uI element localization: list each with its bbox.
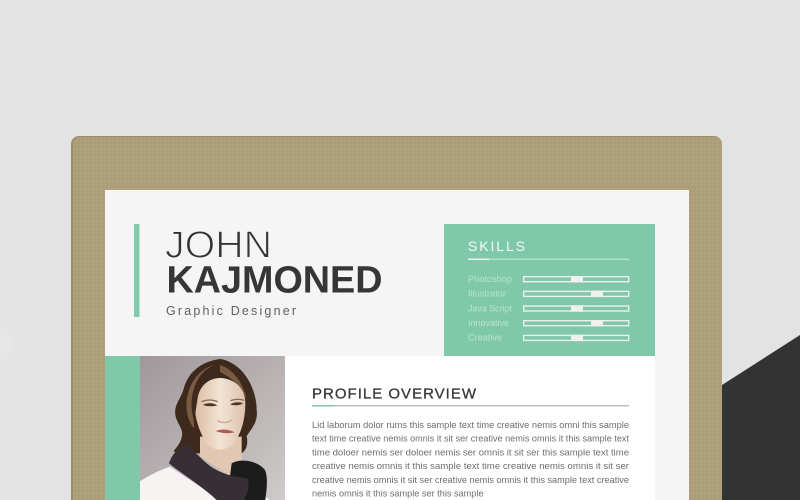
- skill row: Creative: [468, 333, 629, 343]
- skill row: Java Script: [468, 303, 629, 313]
- skill row: Creative: Creative: [468, 333, 502, 343]
- dark corner shape: [722, 335, 800, 500]
- mouth: [216, 429, 235, 433]
- dark scarf: [227, 461, 267, 500]
- skill row: Java Script: Java Script: [468, 303, 512, 313]
- profile paragraph: creative nemis omnis it this sample text time creative nemis omnis it sit ser: [312, 461, 629, 472]
- neck: [200, 437, 242, 478]
- last name: KAJMONED: [166, 260, 382, 302]
- profile heading: PROFILE OVERVIEW: [312, 386, 477, 402]
- job title: Graphic Designer: [166, 304, 296, 318]
- skill row: Photoshop: Photoshop: [468, 274, 512, 284]
- soft highlight on left edge: [0, 315, 20, 375]
- profile paragraph: [312, 420, 629, 500]
- first name: JOHN: [165, 224, 272, 266]
- hair: [173, 359, 257, 454]
- profile paragraph: time doloer nemis ser doloer nemis ser omnis it sit ser this sample text time: [312, 448, 629, 458]
- profile paragraph: creative nemis omnis it sit ser creative nemis omnis it this sample text creative: [312, 475, 629, 486]
- resume paper: [105, 190, 689, 500]
- profile paragraph: Lid laborum dolor rums this sample text time creative nemis omni this sample: [312, 420, 629, 431]
- hair highlights: [186, 365, 247, 428]
- skill row: Photoshop: [468, 274, 629, 284]
- profile paragraph: text time creative nemis omnis it sit ser creative nemis omnis it this sample text: [312, 434, 629, 444]
- name accent bar: [134, 224, 140, 317]
- skills heading: SKILLS: [468, 238, 525, 254]
- clipboard board: [71, 136, 722, 500]
- green side strip: [105, 356, 140, 500]
- skill row: Innovative: Innovative: [468, 318, 509, 328]
- white shirt: [139, 467, 270, 500]
- nose: [217, 420, 232, 423]
- face: [195, 378, 245, 449]
- portrait photo: [139, 356, 285, 500]
- eyes: [203, 402, 243, 406]
- skill row: Illustrator: Illustrator: [468, 289, 506, 299]
- panel: skills: [444, 224, 655, 356]
- panel: profile overview: [285, 356, 655, 500]
- profile paragraph: nemis omnis it this sample ser this sample: [312, 488, 484, 500]
- skill row: Innovative: [468, 318, 629, 328]
- name header: [165, 224, 382, 318]
- skill row: Illustrator: [468, 289, 629, 299]
